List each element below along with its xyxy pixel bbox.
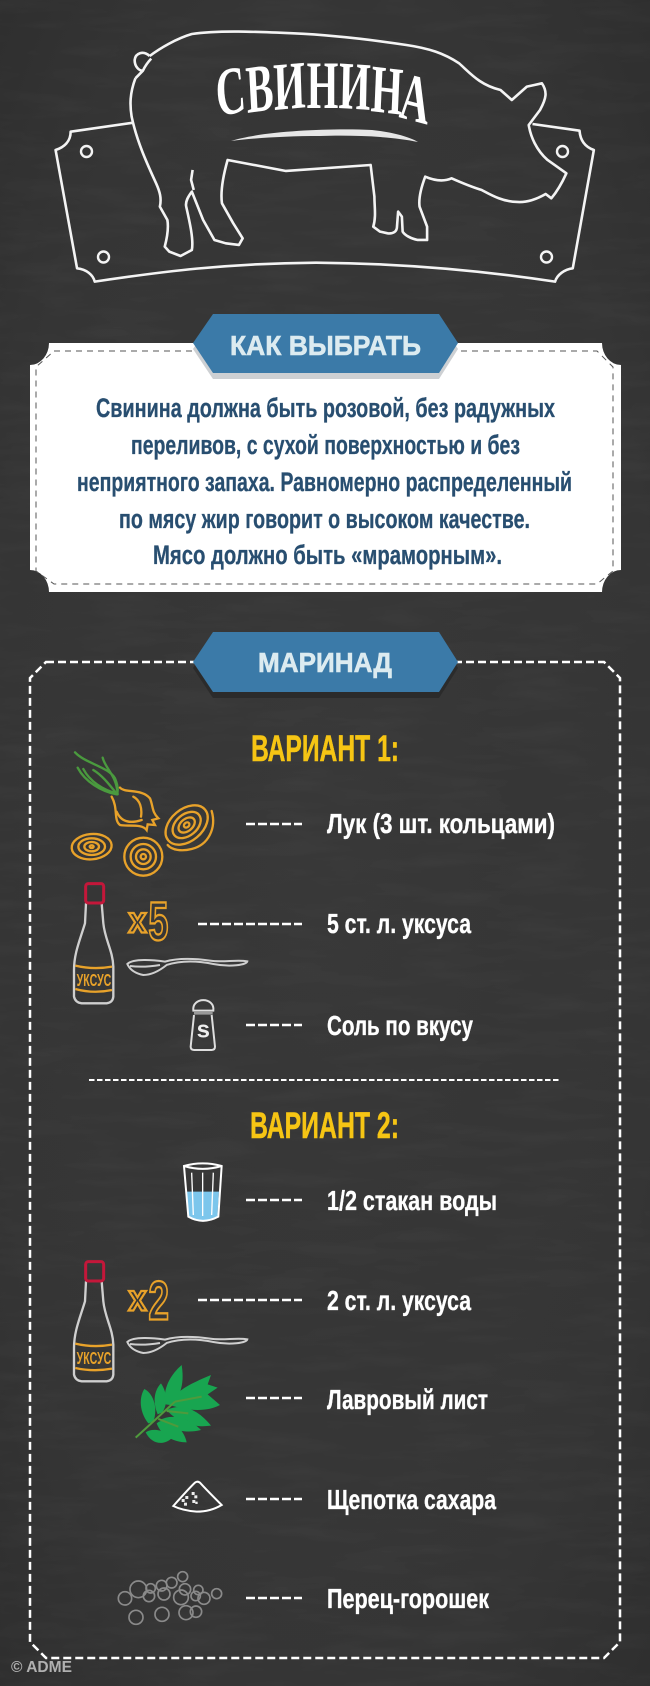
icon: vinegar bottle, x5 and spoon [74,884,247,1003]
label text: УКСУС [77,970,112,990]
panel background [30,343,621,592]
multiplier: 5 [148,890,168,952]
spoon [127,959,247,975]
bottle [74,1281,113,1381]
dashes [246,1024,302,1026]
plaque screw holes [81,146,568,262]
header: pig on plaque [56,32,594,282]
dashes [198,1299,302,1301]
bottle label [75,1344,112,1370]
description text [77,393,572,570]
icon: onion [71,752,215,876]
ingredient text: 5 ст. л. уксуса [327,908,471,939]
chalk underline [231,129,418,142]
icon: peppercorns [118,1572,222,1624]
icon: vinegar bottle, x2 and spoon [74,1262,247,1381]
dashes [246,1597,302,1599]
dashes [198,923,302,925]
panel: marinade frame [30,662,620,1658]
title: СВИНИНА [213,48,433,140]
multiplier: х [128,1278,147,1319]
icon: salt shaker: s [197,1017,210,1044]
dashes [246,1498,302,1500]
ingredient text: Щепотка сахара [327,1484,496,1515]
bottle label [75,966,112,992]
ribbon: how to choose [193,314,458,373]
ingredient text: Перец-горошек [327,1583,490,1614]
ingredient text: Соль по вкусу [327,1010,473,1041]
icon: pinch of sugar [173,1482,222,1512]
ribbon shadow [193,320,458,379]
multiplier: 2 [148,1269,169,1331]
ribbon title: КАК ВЫБРАТЬ [230,330,421,361]
spoon [127,1337,247,1353]
bottle cap [86,1262,104,1281]
icon: glass of water [184,1163,222,1221]
dashes [246,1199,302,1201]
heading: variant 2: ВАРИАНТ 2: [250,1105,399,1146]
divider [89,1079,561,1081]
ribbon title: МАРИНАД [258,647,392,678]
dashes [246,1397,302,1399]
ribbon: marinade [193,632,458,692]
pig outline [131,32,566,256]
multiplier: х [128,900,147,941]
ingredient text: 1/2 стакан воды [327,1185,497,1216]
ingredient text: Лук (3 шт. кольцами) [327,808,555,839]
panel dashed inner border [36,351,613,584]
copyright: © ADME [11,1659,72,1676]
ingredient text: 2 ст. л. уксуса [327,1285,471,1316]
icon: bay leaf [136,1365,220,1443]
bottle cap [86,884,104,903]
panel: how to choose [30,314,621,592]
plaque outline [56,123,594,282]
dashes [246,823,302,825]
heading: variant 1: ВАРИАНТ 1: [251,728,399,769]
ingredient text: Лавровый лист [327,1384,488,1415]
icon: salt shaker [191,1000,215,1050]
ribbon shadow [193,638,458,698]
label text: УКСУС [77,1348,112,1368]
description text: Мясо должно быть «мраморным». [153,540,502,570]
bottle [74,903,113,1003]
